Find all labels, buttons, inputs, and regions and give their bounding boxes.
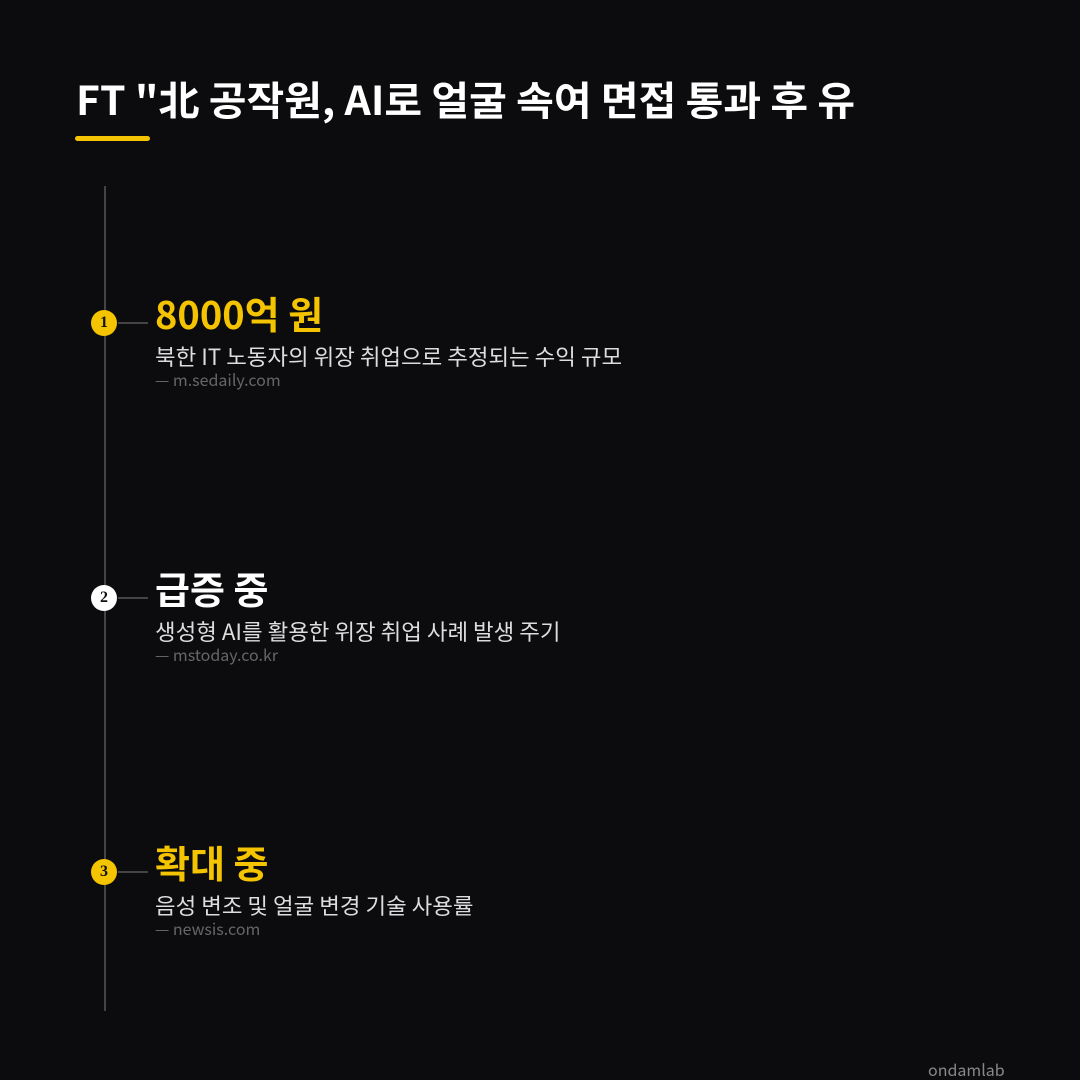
heading 1: 8000억 원 bbox=[155, 285, 323, 340]
timeline line bbox=[104, 186, 106, 1011]
source 3: — newsis.com bbox=[155, 916, 260, 940]
item 3 bbox=[91, 834, 473, 940]
heading 3: 확대 중 bbox=[155, 834, 269, 889]
marker 2 bbox=[91, 585, 117, 611]
marker 3 bbox=[91, 859, 117, 885]
item 1 bbox=[91, 285, 622, 391]
description 3: 음성 변조 및 얼굴 변경 기술 사용률 bbox=[155, 889, 473, 921]
title: FT "北 공작원, AI로 얼굴 속여 면접 통과 후 유 bbox=[76, 69, 855, 127]
item 2 bbox=[91, 560, 560, 666]
source 1: — m.sedaily.com bbox=[155, 367, 281, 391]
marker 3: 3 bbox=[100, 863, 108, 880]
marker 2: 2 bbox=[100, 589, 108, 606]
description 2: 생성형 AI를 활용한 위장 취업 사례 발생 주기 bbox=[155, 615, 560, 647]
source 2: — mstoday.co.kr bbox=[155, 642, 278, 666]
marker 1 bbox=[91, 310, 117, 336]
description 1: 북한 IT 노동자의 위장 취업으로 추정되는 수익 규모 bbox=[155, 340, 622, 372]
marker 1: 1 bbox=[100, 314, 108, 331]
title underline bbox=[75, 136, 150, 141]
heading 2: 급증 중 bbox=[155, 560, 269, 615]
